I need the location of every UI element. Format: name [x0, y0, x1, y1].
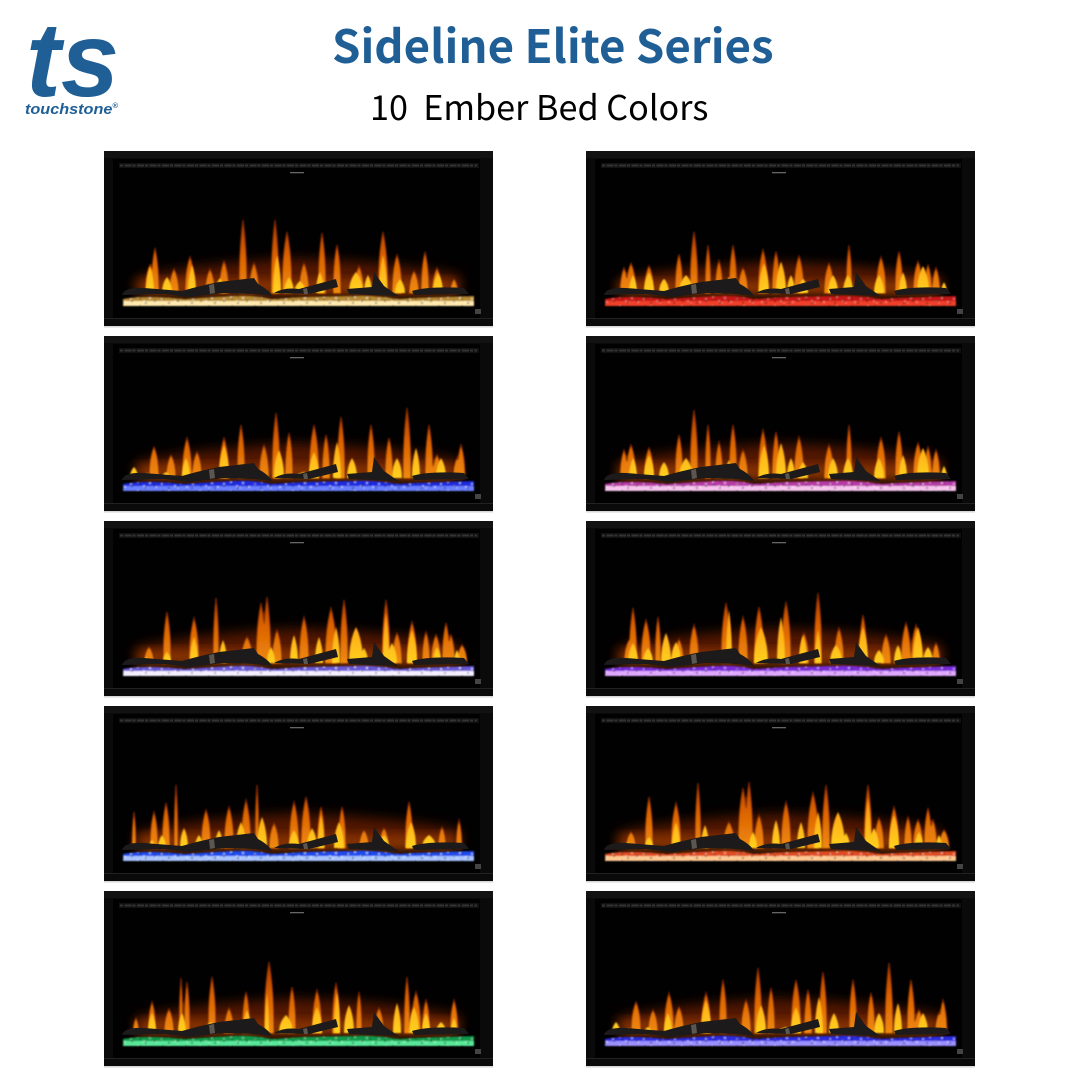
logs	[604, 827, 951, 852]
ember bed	[123, 481, 474, 491]
panel: green ember fireplace	[104, 891, 493, 1068]
flames	[130, 408, 465, 480]
panel: purple ember fireplace	[586, 521, 975, 698]
logs	[604, 457, 951, 482]
panel: blue ember fireplace	[104, 336, 493, 512]
panel: warm white ember fireplace	[104, 151, 493, 328]
logs	[604, 642, 951, 667]
ember bed	[123, 296, 474, 306]
flames	[618, 232, 947, 295]
logs	[122, 1012, 469, 1037]
panel: white-violet ember fireplace	[104, 521, 493, 698]
logs	[604, 1012, 951, 1037]
logs	[604, 272, 951, 297]
ember bed	[123, 1036, 474, 1046]
flames	[612, 963, 947, 1035]
flames	[132, 785, 462, 850]
flames	[136, 597, 467, 665]
logo: touchstone ts: ®	[112, 102, 119, 110]
ember bed	[123, 851, 474, 861]
logs	[122, 457, 469, 482]
ember bed	[605, 1036, 956, 1046]
panel: light blue ember fireplace	[104, 706, 493, 882]
logs	[122, 827, 469, 852]
title: Sideline Elite Series	[332, 11, 774, 77]
subtitle: 10 Ember Bed Colors	[370, 80, 708, 130]
logs	[122, 272, 469, 297]
ember bed	[605, 296, 956, 306]
flames	[136, 220, 460, 295]
panel: pink ember fireplace	[586, 336, 975, 512]
ember bed	[123, 666, 474, 676]
flames	[618, 782, 949, 850]
panel: blue-violet ember fireplace	[586, 891, 975, 1068]
panel: red ember fireplace	[586, 151, 975, 328]
ember bed	[605, 481, 956, 491]
panel: orange ember fireplace	[586, 706, 975, 882]
logo: touchstone ts: touchstone	[25, 101, 106, 118]
flames	[133, 962, 460, 1035]
ember bed	[605, 666, 956, 676]
flames	[618, 593, 942, 665]
logs	[122, 642, 469, 667]
flames	[618, 410, 947, 480]
ember bed	[605, 851, 956, 861]
